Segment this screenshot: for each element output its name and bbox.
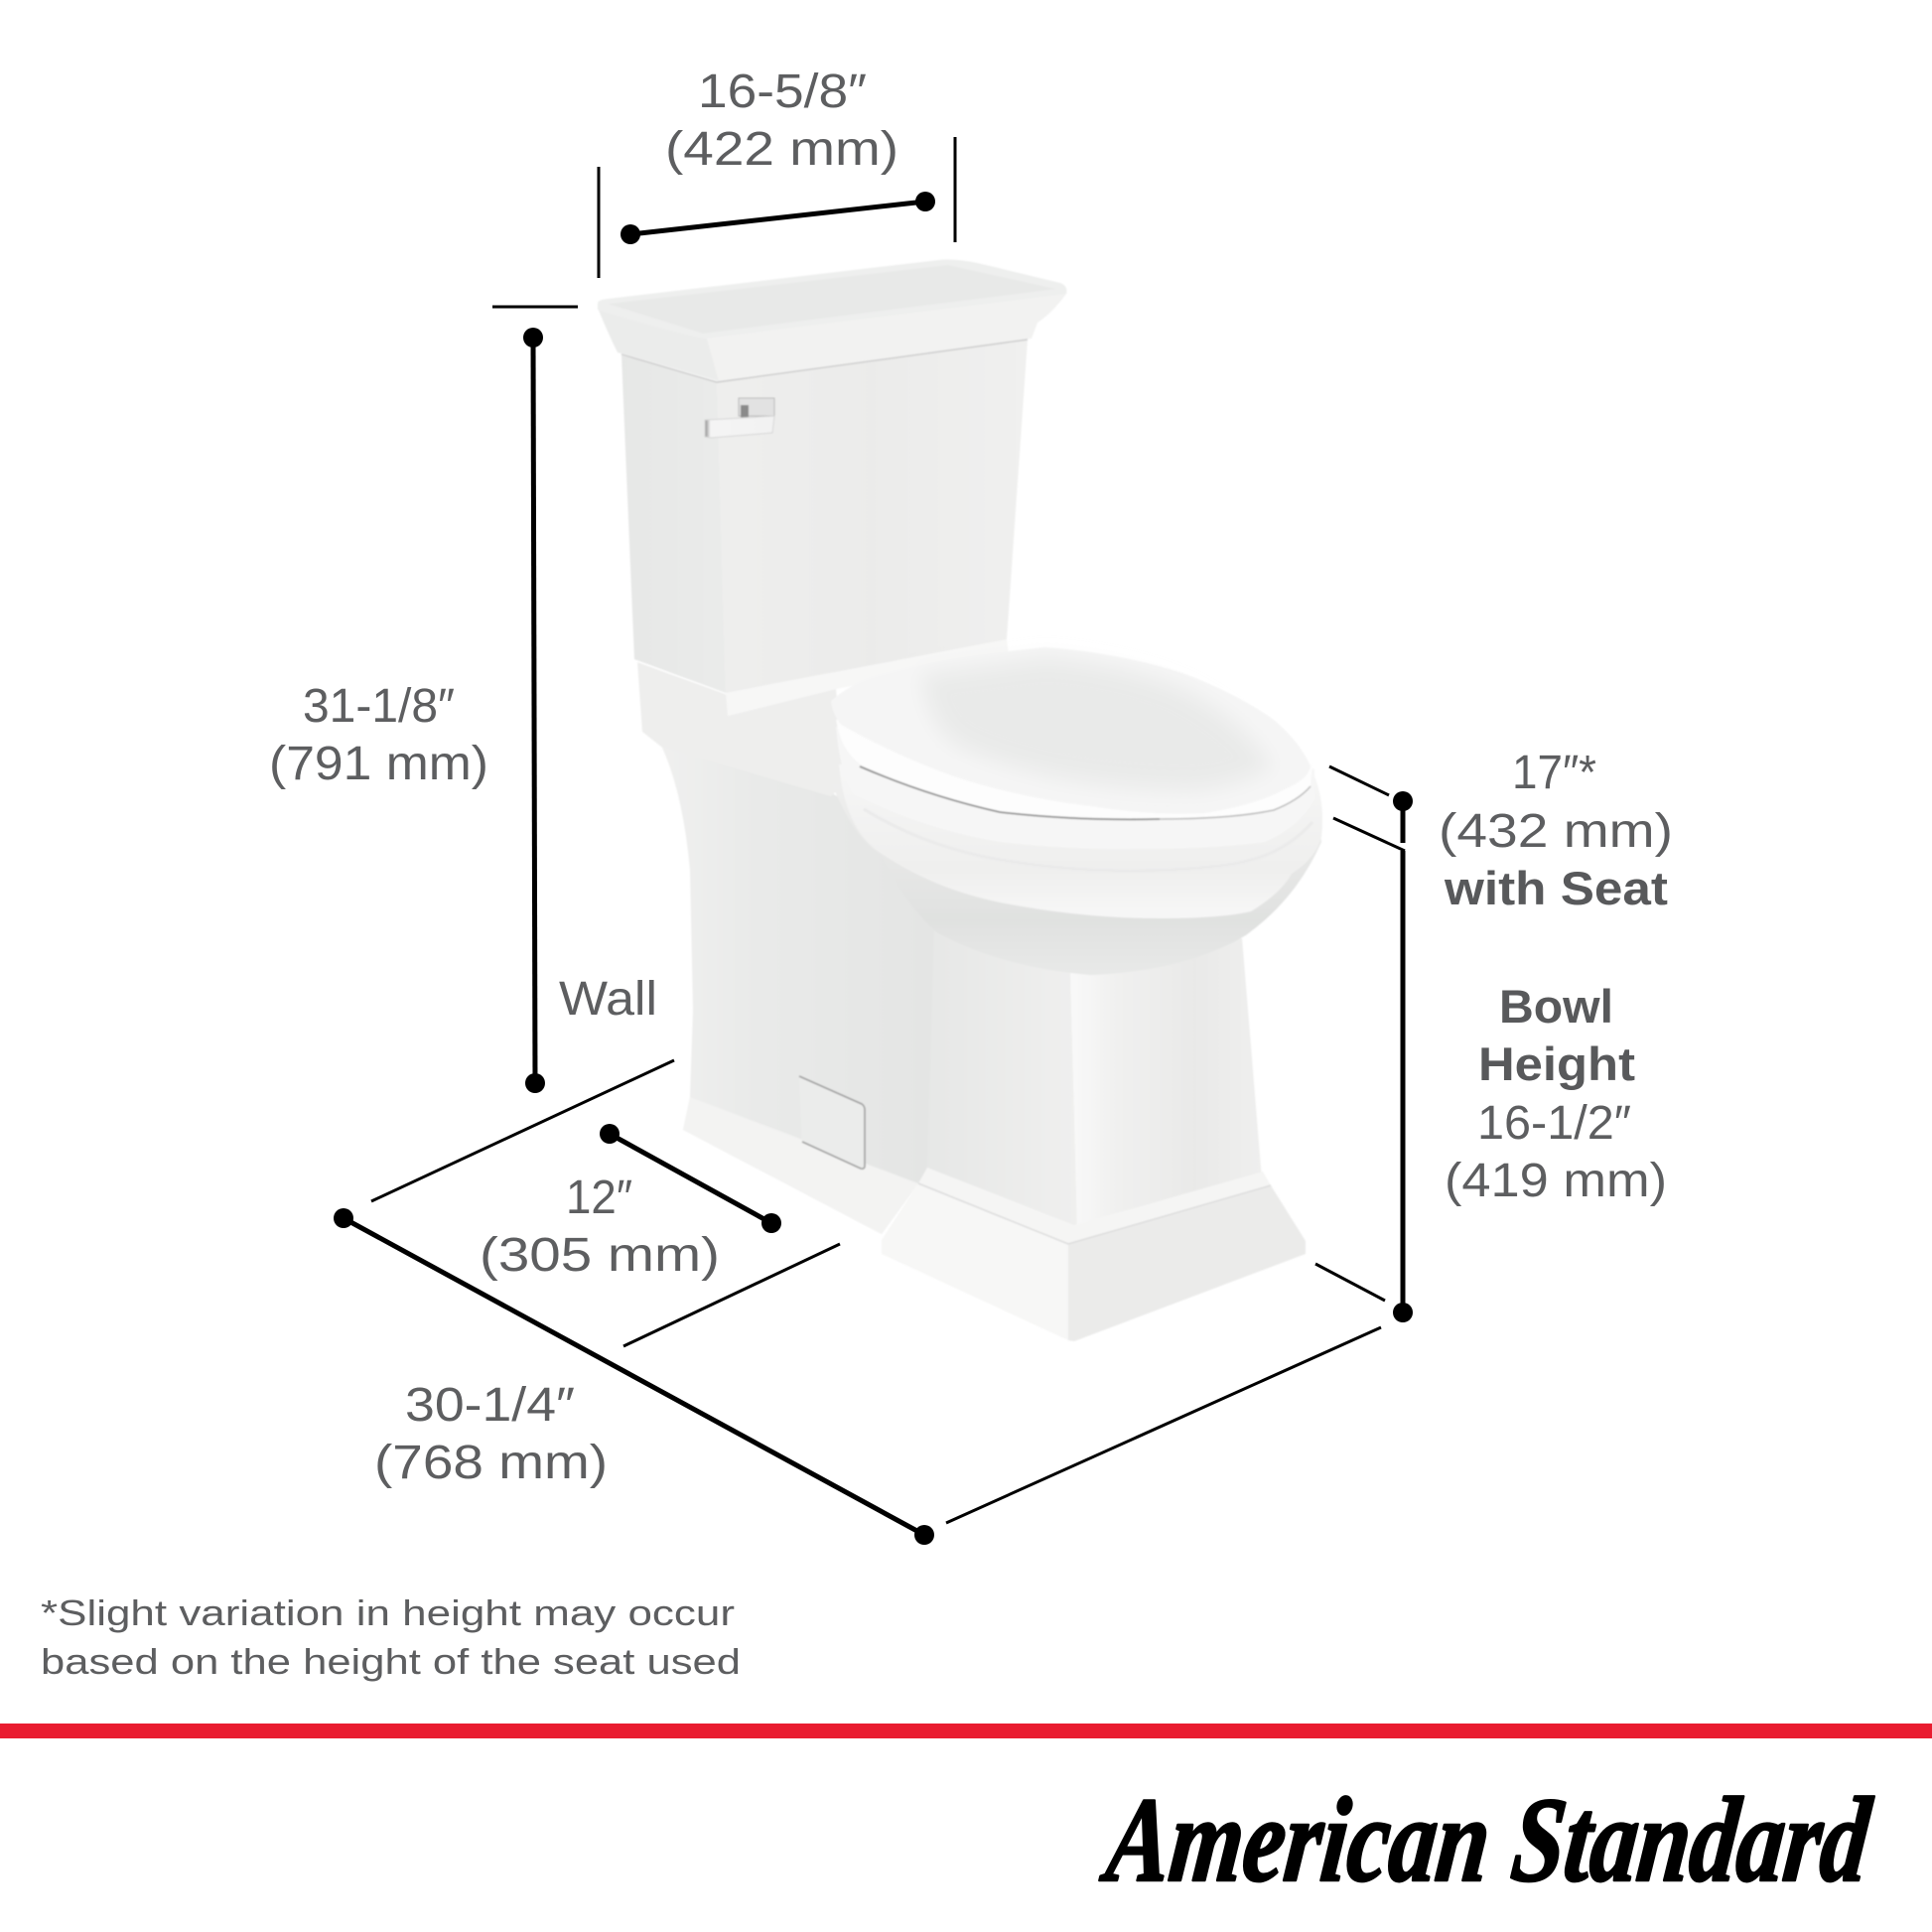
depth line: [344, 1218, 924, 1535]
end dot: [915, 192, 935, 211]
seat top tick: [1329, 766, 1389, 795]
footnote: *Slight variation in height may occur: [41, 1592, 735, 1633]
top tick: [492, 306, 578, 308]
height line: [533, 338, 535, 1083]
seat height label: with Seat: [1444, 862, 1668, 914]
rough-in label: 12″: [566, 1172, 632, 1224]
bowl height label: Height: [1478, 1037, 1635, 1090]
floor tick: [1315, 1264, 1385, 1301]
left extension tick: [598, 167, 600, 278]
seat height label: [1439, 747, 1673, 914]
seat allowance stub: [1400, 801, 1406, 843]
top dot: [1393, 791, 1413, 811]
bottom dot: [1393, 1303, 1413, 1322]
dimension: tank width: [599, 66, 955, 278]
handle lever: [705, 416, 774, 438]
rough-in centre tick: [623, 1244, 840, 1346]
depth label: 30-1/4″: [405, 1379, 575, 1432]
width label: [665, 66, 898, 176]
rough-in label: (305 mm): [480, 1229, 720, 1282]
top dot: [523, 328, 543, 347]
plinth band edge: [918, 1183, 1271, 1244]
tank lid moulding left: [598, 308, 719, 381]
rim step line: [864, 809, 1312, 871]
access panel: [799, 1076, 865, 1169]
seat height label: 17″*: [1512, 747, 1596, 799]
dimension: overall depth: [334, 1208, 1381, 1545]
wall label: Wall: [559, 973, 657, 1026]
tank left face: [621, 355, 726, 693]
right extension tick: [953, 137, 957, 242]
width label: 16-5/8″: [698, 66, 867, 118]
footnote: based on the height of the seat used: [41, 1641, 741, 1682]
rough-in label: [480, 1172, 720, 1282]
lower rear moulding: [683, 1097, 918, 1234]
handle stem: [741, 405, 749, 418]
rim tick: [1333, 818, 1405, 851]
end dot: [914, 1525, 934, 1545]
moulding shadow line: [621, 340, 1028, 382]
start dot: [600, 1124, 620, 1144]
toilet bowl: [832, 780, 1321, 975]
toilet pedestal: [882, 923, 1306, 1341]
plinth right face: [1068, 1185, 1306, 1341]
dimension: bowl height: [1315, 747, 1673, 1322]
width label: (422 mm): [665, 123, 898, 176]
tank shoulder: [726, 639, 1009, 716]
dimension: rough-in 12 in: [371, 1060, 840, 1346]
plinth left face: [882, 1183, 1068, 1340]
bottom dot: [525, 1073, 545, 1093]
tank lid inset: [608, 265, 1056, 334]
pedestal left face: [927, 923, 1077, 1230]
start dot: [621, 224, 640, 244]
start dot: [334, 1208, 353, 1228]
bowl height label: (419 mm): [1445, 1155, 1667, 1207]
seat ring: [836, 695, 1314, 849]
seat lid centre shading: [923, 659, 1271, 789]
red divider bar: [0, 1724, 1932, 1738]
dimension: overall height: [269, 307, 578, 1093]
footnote: [41, 1592, 741, 1682]
tank front face: [717, 340, 1028, 693]
tank lid top: [598, 259, 1066, 339]
seat height label: (432 mm): [1439, 805, 1673, 858]
handle escutcheon: [739, 398, 774, 416]
width line: [630, 202, 925, 234]
rough-in line: [610, 1134, 771, 1223]
seat lid top: [831, 647, 1311, 814]
depth label: [374, 1379, 608, 1489]
tank lid moulding front: [707, 294, 1066, 381]
front tick: [946, 1327, 1381, 1523]
height label: [269, 680, 488, 790]
bowl height label: Bowl: [1499, 980, 1613, 1033]
pedestal right face: [1070, 938, 1262, 1230]
plinth band: [918, 1168, 1271, 1244]
depth label: (768 mm): [374, 1437, 608, 1489]
flush handle: [705, 398, 774, 438]
bowl height label: [1445, 980, 1667, 1207]
rough-in wall tick: [371, 1060, 674, 1201]
seat lid edge: [836, 695, 1312, 818]
bowl height label: 16-1/2″: [1477, 1097, 1631, 1150]
end dot: [761, 1213, 781, 1233]
toilet rear body: [642, 732, 953, 1234]
toilet illustration: [598, 259, 1322, 1341]
deck behind the seat: [637, 662, 844, 796]
height label: 31-1/8″: [303, 680, 455, 733]
bowl rim: [839, 755, 1322, 918]
toilet tank: [598, 259, 1066, 716]
bowl height line: [1400, 851, 1406, 1312]
seat gap shadow: [860, 766, 1160, 819]
height label: (791 mm): [269, 738, 488, 790]
